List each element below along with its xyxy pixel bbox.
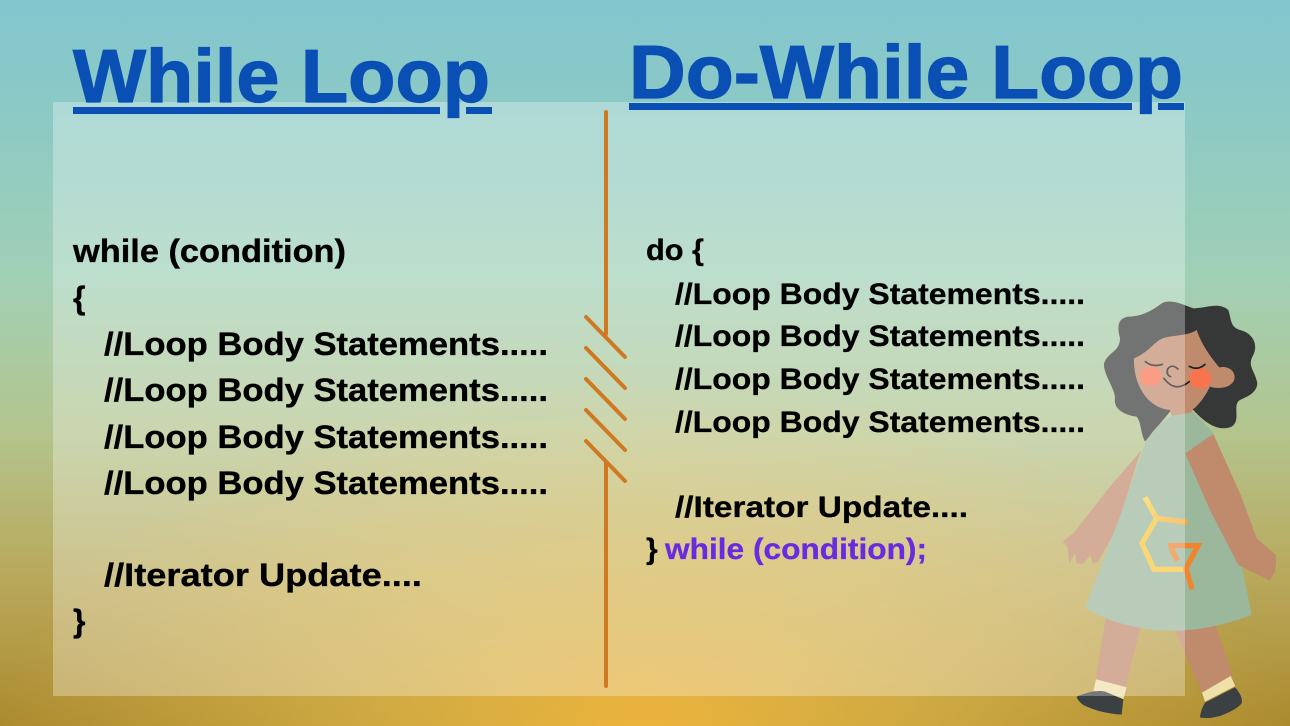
shoes (1077, 687, 1242, 718)
arm left (1063, 450, 1142, 564)
do-while loop code: //Loop Body Statements..... (675, 278, 1085, 311)
head (1104, 302, 1257, 442)
do-while loop code: } (646, 533, 658, 566)
do-while loop code: //Iterator Update.... (675, 491, 968, 524)
illustration: girl walking (1063, 302, 1276, 718)
while loop code: //Loop Body Statements..... (104, 465, 548, 501)
while loop code: //Loop Body Statements..... (104, 419, 548, 455)
face (1134, 330, 1235, 416)
socks (1093, 676, 1235, 702)
cheeks (1140, 366, 1211, 389)
do-while loop code: do { (646, 234, 704, 267)
do-while loop code: while (condition); (664, 533, 927, 566)
facial features (1145, 362, 1205, 387)
while loop code: //Loop Body Statements..... (104, 372, 548, 408)
while loop code: //Loop Body Statements..... (104, 326, 548, 362)
dress logo (1142, 497, 1198, 589)
do-while loop code: //Loop Body Statements..... (675, 320, 1085, 353)
do-while loop code: //Loop Body Statements..... (675, 406, 1085, 439)
arm right (1185, 434, 1276, 581)
translucent content panel (53, 102, 1185, 696)
while loop code: //Iterator Update.... (104, 557, 422, 593)
while loop code: { (73, 280, 85, 316)
while loop code: } (73, 603, 85, 639)
while loop code (72, 233, 548, 639)
dress (1085, 412, 1252, 631)
heading: Do-While Loop: Do-While Loop (629, 30, 1183, 114)
do-while loop code: //Loop Body Statements..... (675, 363, 1085, 396)
hair (1104, 302, 1257, 442)
heading: While Loop: While Loop (73, 34, 490, 118)
do-while loop code (646, 234, 1085, 566)
while loop code: while (condition) (72, 233, 346, 269)
divider with zigzag break (586, 112, 625, 686)
legs (1095, 617, 1233, 695)
